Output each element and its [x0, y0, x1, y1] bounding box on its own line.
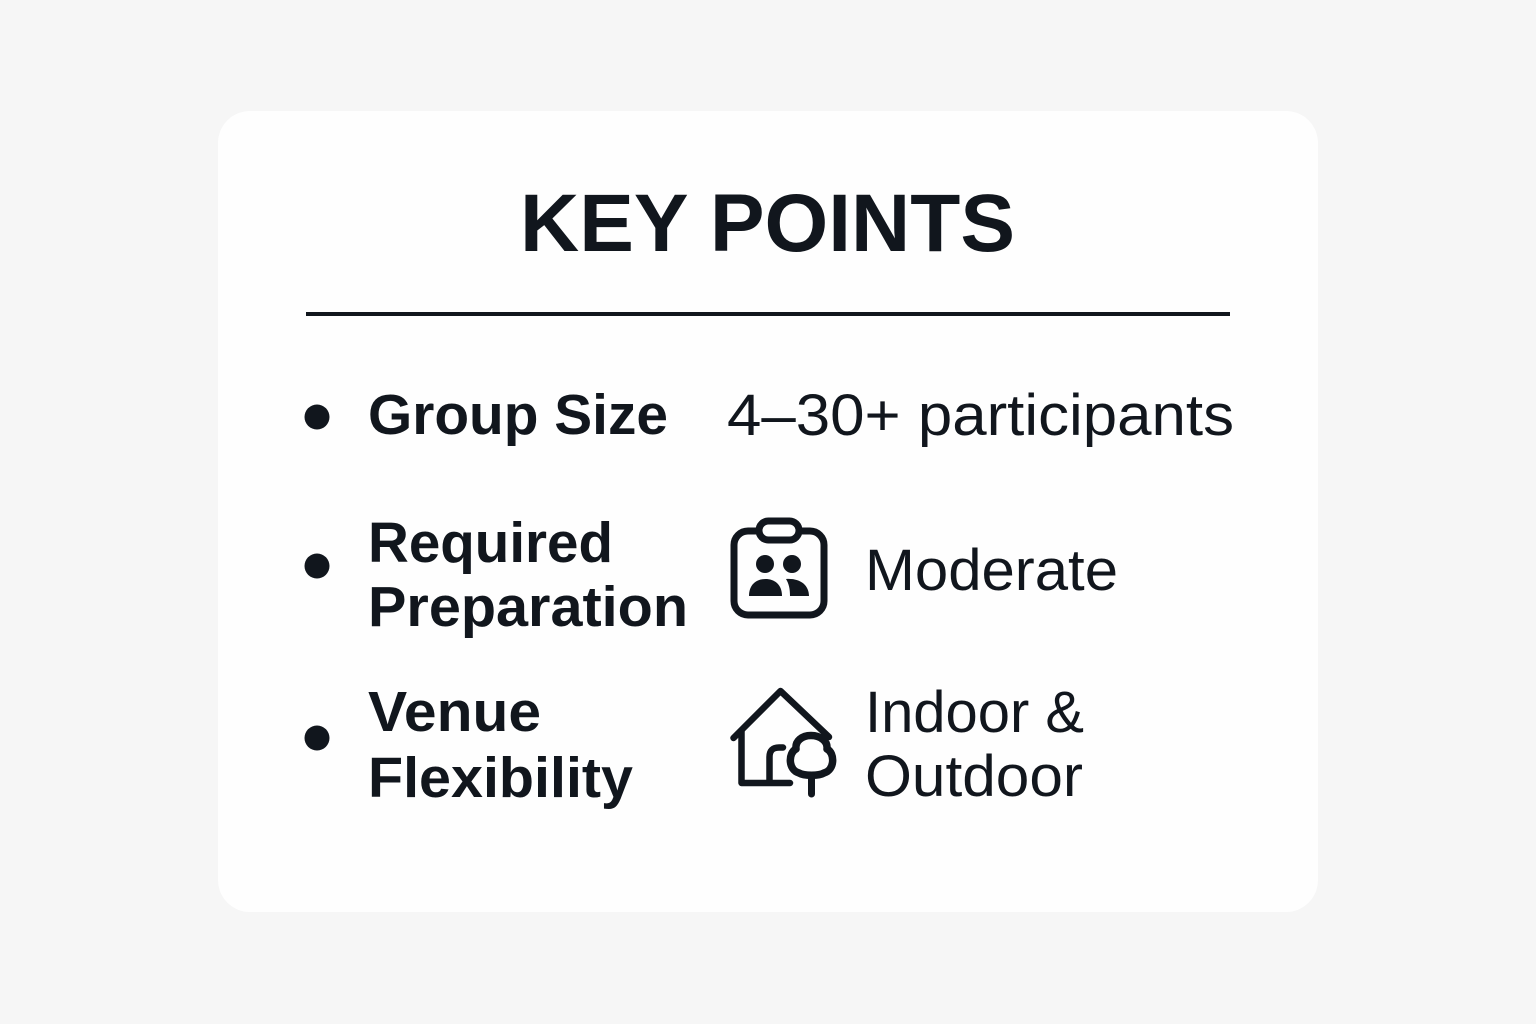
bullet [304, 554, 330, 578]
label: venue flexibility [368, 680, 633, 810]
value: indoor and outdoor: Indoor & [865, 680, 1084, 745]
label: group size: Group Size [368, 383, 668, 447]
bullet [304, 726, 330, 750]
value: participants: 4–30+ participants [727, 383, 1234, 448]
label: required preparation: Required [368, 511, 613, 575]
title: KEY POINTS [520, 178, 1015, 269]
value: indoor and outdoor [865, 680, 1084, 809]
panel: key points card [218, 111, 1318, 912]
row: venue flexibility [304, 680, 1084, 810]
bullet [304, 404, 330, 430]
row: required preparation [304, 511, 1118, 639]
label: required preparation [368, 511, 688, 639]
icon: house with tree [734, 691, 833, 794]
icon: clipboard with people [734, 521, 824, 615]
label: required preparation: Preparation [368, 575, 688, 639]
value: indoor and outdoor: Outdoor [865, 744, 1083, 809]
row: group size [304, 383, 1234, 448]
label: venue flexibility: Flexibility [368, 746, 633, 810]
value: moderate: Moderate [865, 538, 1118, 603]
label: venue flexibility: Venue [368, 680, 541, 744]
